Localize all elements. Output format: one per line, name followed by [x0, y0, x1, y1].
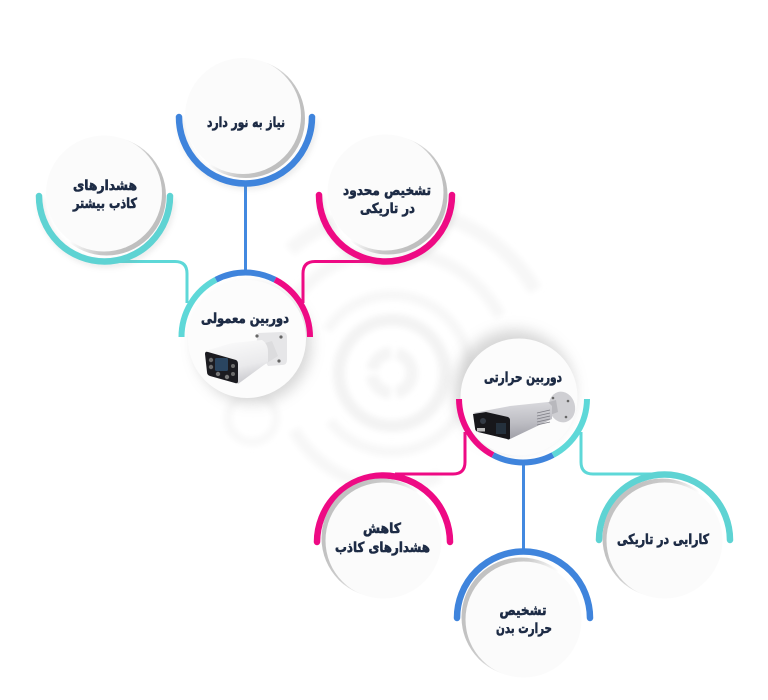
label: body heat detection: [496, 603, 552, 637]
label: needs light: نیاز به نور دارد: [207, 115, 285, 131]
label: more false alarms: کاذب بیشتر: [72, 196, 138, 212]
label: thermal camera: دوربین حرارتی: [484, 370, 562, 386]
node: standard camera: [181, 273, 311, 403]
label: limited detection in darkness: در تاریکی: [360, 201, 415, 217]
connector: teal line, top-left node to standard camera: [118, 262, 187, 303]
icon: thermal bullet camera: [473, 389, 579, 440]
node: reduced false alarms: [317, 476, 450, 598]
label: reduced false alarms: [335, 521, 430, 556]
label: reduced false alarms: هشدارهای کاذب: [335, 540, 430, 556]
label: body heat detection: حرارت بدن: [496, 621, 552, 637]
node: thermal camera: [454, 330, 587, 462]
label: limited detection in darkness: [343, 183, 431, 217]
connector: pink line, thermal camera to lower-left node: [395, 432, 465, 474]
connector: pink line, top-right node to standard camera: [303, 262, 375, 303]
node: needs light: [179, 58, 314, 186]
label: more false alarms: [72, 178, 138, 212]
node: more false alarms: [39, 136, 172, 264]
node: limited detection in darkness: [319, 134, 454, 264]
background watermark: concentric rings: [228, 210, 535, 487]
connector: blue line, thermal camera to bottom node: [522, 462, 525, 552]
node: works in darkness: [599, 475, 730, 598]
label: reduced false alarms: کاهش: [363, 521, 402, 537]
label: works in darkness: کارایی در تاریکی: [617, 532, 710, 548]
connector: teal line, thermal camera to lower-right node: [581, 432, 655, 474]
label: limited detection in darkness: تشخیص محدود: [343, 183, 431, 199]
label: standard camera: دوربین معمولی: [201, 311, 289, 327]
label: body heat detection: تشخیص: [500, 603, 546, 619]
label: more false alarms: هشدارهای: [73, 178, 137, 194]
connector: blue line, top node to standard camera: [244, 184, 247, 273]
icon: bullet security camera: [205, 332, 287, 384]
node: body heat detection: [457, 552, 590, 678]
